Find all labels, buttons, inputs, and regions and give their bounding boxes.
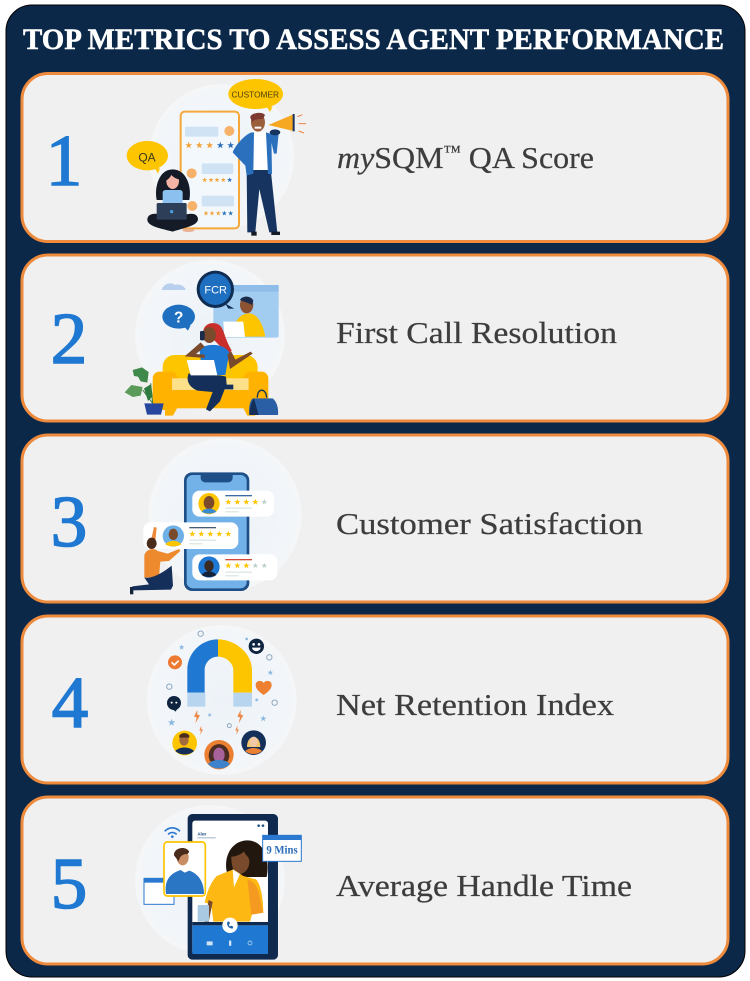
review card bottom xyxy=(192,554,277,580)
icon: wifi xyxy=(165,828,180,834)
plant xyxy=(125,367,164,415)
bag xyxy=(249,390,278,415)
person: woman on phone xyxy=(185,323,253,411)
speech bubble: FCR: FCR xyxy=(204,285,227,297)
speech bubble: CUSTOMER: CUSTOMER xyxy=(232,89,279,99)
panel: metric 4 xyxy=(22,616,728,783)
speech bubble: QA: QA xyxy=(138,151,156,165)
label 1: ™ xyxy=(444,142,461,161)
number 5: 5 xyxy=(51,843,87,924)
number 3: 3 xyxy=(51,481,87,562)
icon: heart xyxy=(256,681,272,695)
customer avatar right xyxy=(241,730,266,755)
panel: metric 2 xyxy=(22,255,728,421)
illustration: first call resolution xyxy=(125,260,285,416)
icon: chat bubble xyxy=(167,696,181,712)
speech bubble: question xyxy=(162,305,195,331)
person: kneeling user xyxy=(130,527,180,594)
customer avatar middle xyxy=(204,740,234,769)
timer card: 9 Mins: 9 Mins xyxy=(266,845,298,857)
icon: smiley xyxy=(249,639,264,654)
person: woman with laptop xyxy=(147,169,198,232)
label 3: Customer Satisfaction xyxy=(336,506,644,541)
review card middle xyxy=(143,522,238,549)
illustration: customer satisfaction xyxy=(130,438,302,594)
panel: metric 1 xyxy=(22,74,728,242)
illustration: magnet attracting customers xyxy=(147,625,297,775)
label 5: Average Handle Time xyxy=(336,868,632,903)
sofa xyxy=(153,355,268,416)
panel: metric 3 xyxy=(22,435,728,602)
speech bubble: CUSTOMER xyxy=(228,79,283,112)
label 1: QA Score xyxy=(461,140,594,175)
icon: check badge xyxy=(168,655,182,669)
label 1: mySQM xyxy=(337,140,441,175)
panel: metric 5 xyxy=(22,797,728,964)
caller video card xyxy=(164,842,205,896)
number 1: 1 xyxy=(46,120,82,201)
number 2: 2 xyxy=(51,298,87,379)
number 4: 4 xyxy=(52,662,88,743)
customer avatar left xyxy=(172,731,197,755)
illustration: video call handle time: Alex xyxy=(197,831,207,836)
call control bar xyxy=(192,918,268,954)
title: TOP METRICS TO ASSESS AGENT PERFORMANCE xyxy=(23,23,724,56)
icon: browser window xyxy=(144,878,174,904)
speech bubble: QA xyxy=(127,141,168,174)
icon: sparks xyxy=(194,710,243,735)
label 2: First Call Resolution xyxy=(336,315,618,350)
timer card: 9 Mins xyxy=(263,835,301,861)
speech bubble: question: ? xyxy=(174,309,183,326)
speech bubble: FCR xyxy=(197,271,234,309)
illustration: QA and customer reviews xyxy=(127,79,306,236)
person: man with megaphone xyxy=(233,113,306,236)
review card top xyxy=(192,491,274,517)
person: agent in yellow xyxy=(205,840,268,922)
label 4: Net Retention Index xyxy=(336,687,615,722)
magnet xyxy=(187,639,252,707)
illustration: video call handle time xyxy=(135,805,301,960)
